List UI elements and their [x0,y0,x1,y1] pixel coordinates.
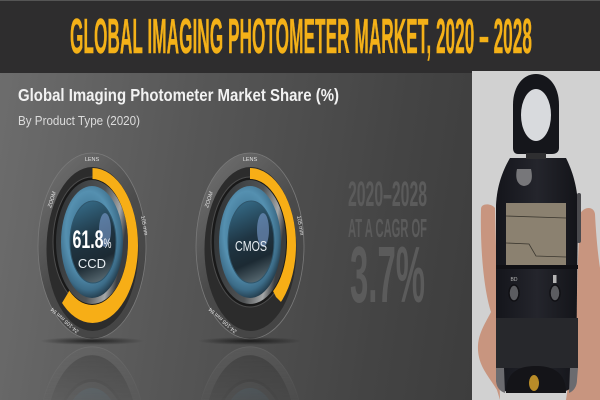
lens ring labels: 105 mm [139,215,148,236]
lens ring labels: ZOOM [47,191,58,210]
value: 61.8%: 61.8% [72,226,111,254]
lens ring labels: 24-105 mm f/4 [50,306,80,334]
screen [506,203,566,265]
lens shadows [40,337,302,345]
label: CCD: CCD [78,256,106,271]
photo: imaging photometer in hand [472,71,600,400]
gray button [516,169,532,186]
button markings: BD [511,277,518,283]
lens reflections [56,346,294,396]
lens ring labels: LENS [243,157,258,163]
hand [478,204,600,400]
meter head [513,74,559,154]
white dome [521,89,551,141]
lens chart: CCD 61.8% [38,153,148,339]
meter body [496,158,578,393]
text: 3.7% [350,230,425,319]
chart heading: Global Imaging Photometer Market Share (%) [18,85,339,105]
lens ring labels: 105 mm [295,215,304,236]
lens chart: CMOS [196,153,304,339]
arc: CCD share [62,168,138,323]
label: CMOS: CMOS [235,239,267,255]
lens ring labels: ZOOM [204,191,215,210]
chart subheading: By Product Type (2020) [18,113,140,128]
lens ring labels [204,157,304,334]
CAGR callout [348,175,427,319]
lens ring labels [47,157,148,334]
header band [0,0,600,73]
lens ring labels: LENS [85,157,100,163]
lens ring labels: 24-105 mm f/4 [208,306,238,334]
arc: CMOS share [250,168,296,302]
text: AT A CAGR OF [348,213,427,243]
tripod socket [506,366,566,393]
button markings [511,275,556,283]
text: 2020–2028 [348,175,427,214]
round buttons [509,285,560,301]
